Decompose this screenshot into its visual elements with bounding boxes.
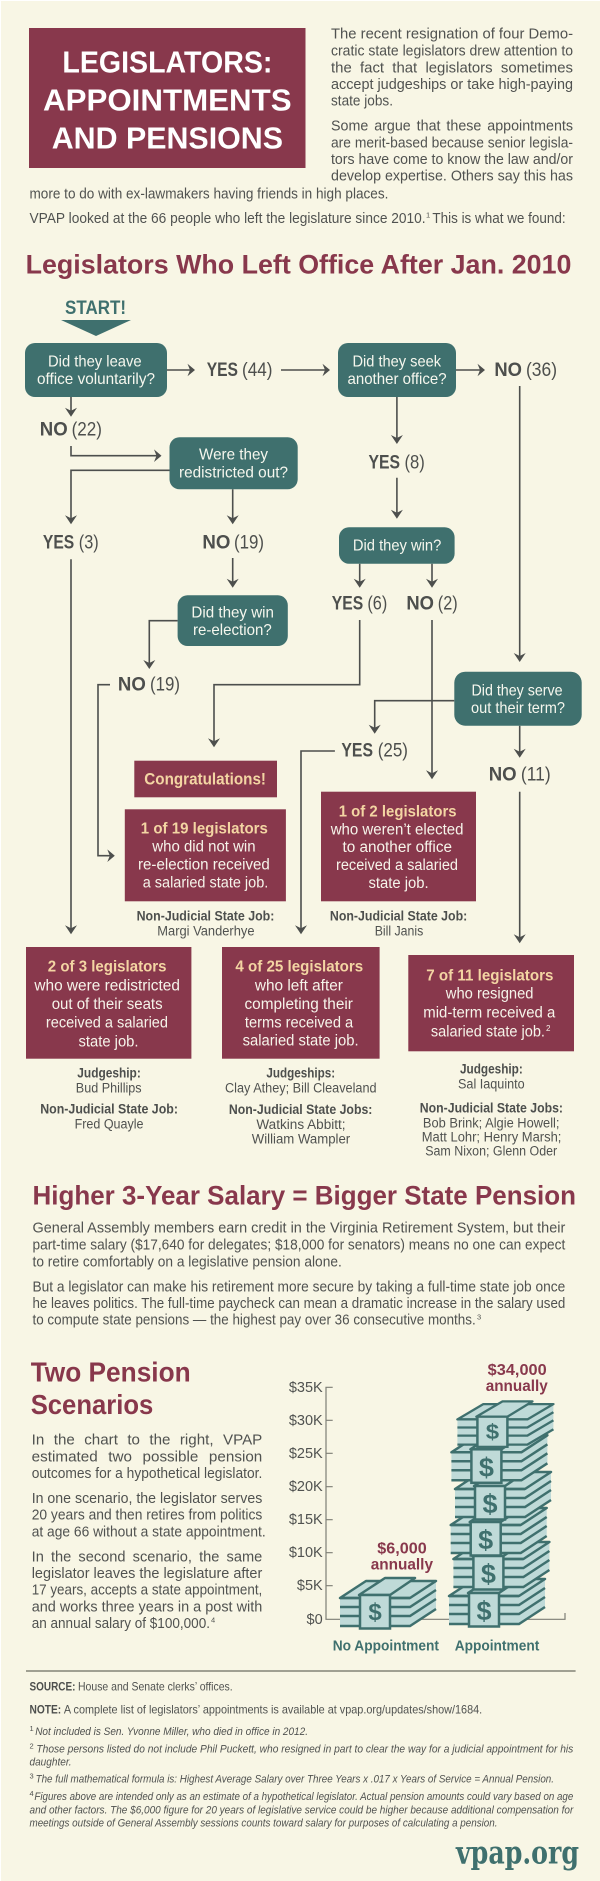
names: 2 of 3: Non-Judicial State Job:	[40, 1101, 178, 1116]
answer: no 36	[494, 360, 557, 381]
outcome: 7 of 11: mid-term received a	[423, 1005, 556, 1022]
heading: salary and pension: Higher 3-Year Salary = Bigger State Pension	[32, 1180, 576, 1210]
outcome: congratulations: Congratulations!	[144, 769, 266, 788]
answer: no 19	[202, 533, 264, 554]
answer: no 2: NO	[406, 594, 434, 615]
question: left office voluntarily: office voluntarily?	[37, 371, 155, 388]
source and note: House and Senate clerks’ offices.	[78, 1680, 233, 1694]
answer: yes 3: YES	[43, 533, 74, 554]
outcome: 2 of 3: state job.	[78, 1033, 138, 1050]
outcome: 4 of 25	[222, 947, 380, 1059]
text: scenarios: outcomes for a hypothetical legislator.	[32, 1466, 262, 1482]
text: salary explanation: to retire comfortably on a legislative pension alone.	[32, 1254, 342, 1270]
title box	[29, 28, 306, 168]
text: scenarios: at age 66 without a state appointment.	[32, 1524, 266, 1540]
outcome: 4 of 25: 4 of 25 legislators	[235, 958, 363, 975]
names: 4 of 25: Clay Athey; Bill Cleaveland	[225, 1080, 377, 1095]
answer: no 11: (11)	[521, 764, 551, 785]
chart axes and tick labels	[289, 1380, 565, 1628]
value label: 34,000	[486, 1362, 548, 1395]
answer: no 22	[40, 419, 102, 440]
question: seek another office: Did they seek	[352, 353, 442, 370]
text: scenarios: 17 years, accepts a state appointment,	[32, 1583, 262, 1599]
outcome: 1 of 2: received a salaried	[336, 857, 458, 874]
footnotes: 4	[30, 1789, 34, 1798]
names: 4 of 25: Watkins Abbitt;	[256, 1117, 346, 1132]
intro text: the fact that legislators sometimes	[331, 60, 573, 76]
names: 2 of 3	[40, 1065, 178, 1131]
question: seek another office	[338, 343, 456, 397]
answer: yes 3	[43, 533, 99, 554]
question: left office voluntarily	[25, 343, 167, 397]
answer: yes 44: YES	[207, 360, 238, 381]
chart axes and tick labels: $25K	[289, 1446, 323, 1462]
arrows: serve out term branch	[295, 386, 526, 943]
chart axes and tick labels: $20K	[289, 1479, 323, 1495]
money stack: appointment	[449, 1401, 553, 1626]
intro text: The recent resignation of four Demo-	[331, 26, 573, 42]
answer: yes 44: (44)	[242, 360, 272, 381]
outcome: 1 of 2: state job.	[368, 875, 429, 892]
question: left office voluntarily: Did they leave	[48, 353, 142, 370]
outcome: 7 of 11: 7 of 11 legislators	[426, 967, 553, 984]
names: 7 of 11: Bob Brink; Algie Howell;	[423, 1115, 560, 1130]
category labels	[333, 1639, 539, 1655]
question: win re-election: re-election?	[193, 622, 272, 639]
answer: yes 44	[207, 360, 272, 381]
start marker: START!	[65, 298, 126, 319]
source and note: A complete list of legislators’ appointments is available at vpap.org/updates/show/1684.	[64, 1703, 482, 1717]
names: 7 of 11	[420, 1061, 563, 1158]
outcome: 1 of 2	[321, 792, 476, 901]
answer: yes 25	[341, 741, 408, 762]
intro text: tors have come to know the law and/or	[331, 152, 573, 168]
answer: no 19: NO	[202, 533, 230, 554]
money stack: appointment: $	[479, 1452, 494, 1482]
money stack: appointment: $	[476, 1596, 492, 1626]
question: win re-election	[178, 595, 288, 646]
footnotes: Not included is Sen. Yvonne Miller, who died in office in 2012.	[35, 1726, 308, 1738]
intro text: state jobs.	[331, 94, 393, 110]
outcome: 2 of 3: who were redistricted	[33, 977, 180, 994]
answer: no 36: (36)	[526, 360, 557, 381]
category labels: No Appointment	[333, 1639, 439, 1655]
outcome: 1 of 19: a salaried state job.	[143, 874, 268, 891]
answer: yes 8: (8)	[404, 452, 425, 473]
question: redistricted out	[170, 437, 298, 489]
intro text: Some argue that these appointments	[331, 119, 573, 135]
outcome: 7 of 11: who resigned	[445, 986, 534, 1003]
text: scenarios: estimated two possible pension	[32, 1449, 262, 1465]
answer: no 2	[406, 594, 458, 615]
outcome: 1 of 19: who did not win	[151, 839, 256, 856]
text: salary explanation: part-time salary ($17,640 for delegates; $18,000 for senators) means no one can expect	[32, 1238, 565, 1254]
outcome: 1 of 2: who weren’t elected	[330, 821, 464, 838]
names: Margi Vanderhye: Non-Judicial State Job:	[137, 909, 274, 924]
answer: yes 6: (6)	[367, 594, 387, 615]
outcome: 4 of 25: terms received a	[245, 1015, 354, 1032]
answer: no 19 second	[118, 675, 180, 696]
outcome: 7 of 11	[408, 955, 574, 1051]
answer: yes 6	[332, 594, 387, 615]
chart axes and tick labels: $5K	[297, 1578, 323, 1594]
intro text: develop expertise. Others say this has	[331, 169, 573, 185]
names: Bill Janis	[330, 909, 467, 939]
question: serve out term: Did they serve	[472, 682, 563, 699]
question: seek another office: another office?	[348, 371, 447, 388]
arrows: re-election branch	[98, 621, 178, 862]
names: 4 of 25	[225, 1065, 377, 1146]
text: scenarios: an annual salary of $100,000.	[32, 1616, 210, 1632]
names: 7 of 11: Judgeship:	[460, 1061, 523, 1076]
money stack: no appointment	[340, 1578, 436, 1628]
money stack: appointment: $	[478, 1525, 493, 1555]
intro text: more to do with ex-lawmakers having friends in high places.	[30, 186, 388, 202]
text: salary explanation: General Assembly members earn credit in the Virginia Retirement System, but their	[32, 1221, 565, 1237]
value label: 6,000	[371, 1540, 433, 1573]
arrows: redistricted branch	[65, 446, 239, 934]
names: Bill Janis: Non-Judicial State Job:	[330, 909, 467, 924]
chart: pension comparison	[289, 1362, 565, 1655]
answer: yes 8	[368, 452, 425, 473]
text: salary explanation: to compute state pensions — the highest pay over 36 consecutive months.	[32, 1313, 476, 1329]
answer: no 22: (22)	[72, 419, 102, 440]
answer: no 19 second: NO	[118, 675, 146, 696]
text: scenarios: In one scenario, the legislator serves	[32, 1491, 262, 1507]
outcome: 7 of 11: 2	[546, 1024, 551, 1033]
outcome: 1 of 19	[125, 809, 286, 901]
chart axes and tick labels: $30K	[289, 1413, 323, 1429]
names: 2 of 3: Bud Phillips	[76, 1080, 142, 1095]
names: Margi Vanderhye	[137, 909, 274, 939]
outcome: 4 of 25: who left after	[254, 977, 343, 994]
title box: APPOINTMENTS	[43, 83, 292, 117]
money stack: appointment: $	[486, 1419, 499, 1444]
names: 4 of 25: Non-Judicial State Jobs:	[229, 1102, 372, 1117]
answer: no 19: (19)	[234, 533, 264, 554]
names: 2 of 3: Fred Quayle	[75, 1116, 144, 1131]
text: scenarios: In the second scenario, the same	[32, 1549, 262, 1565]
answer: no 11: NO	[489, 764, 517, 785]
answer: no 19 second: (19)	[150, 675, 180, 696]
outcome: congratulations	[134, 761, 277, 797]
text: salary explanation: 3	[477, 1312, 481, 1322]
outcome: 2 of 3: received a salaried	[46, 1015, 168, 1032]
text: scenarios: 20 years and then retires from politics	[32, 1508, 262, 1524]
arrows: first row	[65, 364, 485, 417]
chart axes and tick labels: $35K	[289, 1380, 323, 1396]
chart axes and tick labels: $15K	[289, 1512, 323, 1528]
outcome: 1 of 19: 1 of 19 legislators	[141, 821, 268, 838]
chart axes and tick labels: $10K	[289, 1545, 323, 1561]
answer: yes 6: YES	[332, 594, 363, 615]
heading: flowchart: Legislators Who Left Office After Jan. 2010	[26, 249, 571, 279]
footnotes: 1	[30, 1724, 34, 1733]
answer: yes 25: YES	[341, 741, 373, 762]
outcome: 7 of 11: salaried state job.	[431, 1024, 545, 1041]
money stack: appointment: $	[482, 1489, 498, 1519]
names: 7 of 11: Matt Lohr; Henry Marsh;	[422, 1129, 561, 1144]
outcome: 1 of 2: 1 of 2 legislators	[339, 804, 457, 821]
heading: two pension scenarios: Scenarios	[31, 1389, 153, 1420]
answer: yes 8: YES	[368, 452, 400, 473]
source and note	[30, 1680, 482, 1717]
heading: two pension scenarios: Two Pension	[31, 1356, 191, 1387]
footnotes: The full mathematical formula is: Highest Average Salary over Three Years x .017 x Years of Service = Annual Pension.	[36, 1774, 554, 1786]
footnotes: daughter.	[30, 1757, 72, 1769]
source and note: SOURCE:	[30, 1680, 75, 1694]
arrows: another office branch	[208, 397, 438, 779]
answer: no 22: NO	[40, 419, 68, 440]
names: 7 of 11: Non-Judicial State Jobs:	[420, 1100, 563, 1115]
question: win re-election: Did they win	[191, 604, 274, 621]
answer: yes 3: (3)	[79, 533, 99, 554]
intro text: This is what we found:	[432, 211, 566, 227]
outcome: 2 of 3	[26, 947, 191, 1059]
intro text: VPAP looked at the 66 people who left the legislature since 2010.	[30, 211, 426, 227]
value label: 34,000: $34,000	[488, 1362, 547, 1379]
value label: 34,000: annually	[486, 1378, 548, 1395]
chart axes and tick labels: $0	[307, 1612, 323, 1628]
names: Bill Janis: Bill Janis	[375, 924, 424, 939]
source and note: NOTE:	[30, 1703, 61, 1717]
question: did they win: Did they win?	[353, 537, 441, 554]
outcome: 2 of 3: out of their seats	[52, 996, 163, 1013]
intro text: 1	[426, 210, 430, 220]
text: salary explanation: he leaves politics. The full-time paycheck can mean a dramatic increase in the salary used	[32, 1296, 565, 1312]
title box: AND PENSIONS	[52, 121, 283, 155]
money stack: appointment: $	[481, 1559, 496, 1589]
footnotes	[30, 1724, 575, 1830]
text: scenarios	[32, 1433, 266, 1632]
answer: no 36: NO	[494, 360, 522, 381]
question: redistricted out: Were they	[199, 447, 268, 464]
text: salary explanation: But a legislator can make his retirement more secure by taking a full-time state job once	[32, 1279, 565, 1295]
footnotes: 3	[30, 1772, 34, 1781]
text: scenarios: In the chart to the right, VPAP	[32, 1433, 262, 1449]
intro text: accept judgeships or take high-paying	[331, 77, 573, 93]
text: scenarios: 4	[211, 1616, 215, 1624]
names: 4 of 25: Judgeships:	[266, 1065, 335, 1080]
names: 7 of 11: Sam Nixon; Glenn Oder	[425, 1143, 558, 1158]
question: did they win	[339, 527, 455, 564]
text: salary explanation	[32, 1221, 565, 1329]
category labels: Appointment	[455, 1639, 539, 1655]
question: serve out term	[454, 672, 582, 726]
answer: no 2: (2)	[438, 594, 458, 615]
question: redistricted out: redistricted out?	[179, 464, 288, 481]
title box: LEGISLATORS:	[62, 45, 272, 79]
heading: two pension scenarios	[31, 1356, 191, 1420]
start marker	[61, 298, 131, 336]
footnotes: 2	[30, 1741, 34, 1750]
footnotes: Those persons listed do not include Phil Puckett, who resigned in part to clear the way for a judicial appointment for his	[36, 1743, 574, 1755]
names: Margi Vanderhye: Margi Vanderhye	[157, 924, 254, 939]
answer: no 11	[489, 764, 551, 785]
names: 7 of 11: Sal Iaquinto	[458, 1076, 525, 1091]
intro text: are merit-based because senior legisla-	[331, 135, 573, 151]
text: scenarios: legislator leaves the legislature after	[32, 1566, 262, 1582]
outcome: 4 of 25: salaried state job.	[243, 1032, 359, 1049]
text: scenarios: and works three years in a post with	[32, 1599, 262, 1615]
outcome: 1 of 2: to another office	[342, 839, 452, 856]
value label: 6,000: $6,000	[377, 1540, 427, 1557]
outcome: 1 of 19: re-election received	[138, 857, 270, 874]
footnotes: meetings outside of General Assembly sessions counts toward salary for purposes of calculating a pension.	[30, 1818, 498, 1830]
intro text: cratic state legislators drew attention to	[331, 43, 573, 59]
flowchart	[25, 298, 582, 943]
intro text	[30, 26, 573, 227]
names: 2 of 3: Judgeship:	[77, 1065, 141, 1080]
value label: 6,000: annually	[371, 1556, 433, 1573]
question: serve out term: out their term?	[471, 700, 565, 717]
outcome: 2 of 3: 2 of 3 legislators	[48, 958, 166, 975]
names: 4 of 25: William Wampler	[252, 1131, 351, 1146]
money stack: no appointment: $	[368, 1599, 382, 1626]
outcome: 4 of 25: completing their	[244, 996, 353, 1013]
answer: yes 25: (25)	[378, 741, 408, 762]
